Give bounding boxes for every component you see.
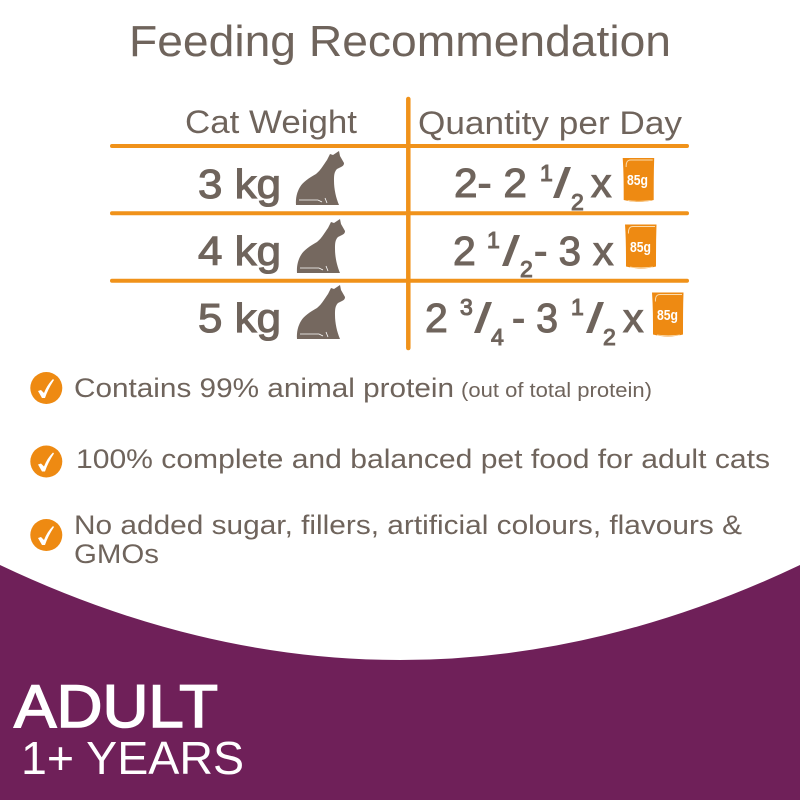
icon: check	[30, 446, 62, 478]
row: 5 kg: 2	[603, 324, 616, 350]
life stage label	[14, 673, 244, 784]
row: 4 kg	[198, 219, 656, 282]
row: 3 kg: 2	[571, 189, 584, 215]
row: 5 kg	[198, 285, 684, 350]
icon: check	[30, 519, 62, 551]
row: 5 kg: 2	[425, 295, 448, 341]
column heading: quantity per day: Quantity per Day	[418, 105, 682, 141]
panel: feeding table	[112, 99, 687, 350]
benefit: animal protein: (out of total protein)	[461, 380, 652, 402]
row: 5 kg: /	[475, 295, 492, 341]
icon: 85g pouch: 85g	[630, 239, 651, 256]
icon: 85g pouch	[623, 158, 654, 202]
row: 3 kg: /	[554, 160, 571, 206]
benefit: complete and balanced: 100% complete and balanced pet food for adult cats	[76, 444, 770, 474]
row: 4 kg: /	[503, 228, 520, 274]
purple footer band	[0, 565, 800, 800]
row: 3 kg: x	[591, 160, 612, 206]
icon: cat	[297, 219, 345, 273]
life stage label: ADULT	[14, 673, 218, 740]
row: 4 kg: 4 kg	[198, 228, 281, 274]
icon: 85g pouch	[652, 292, 684, 336]
icon: 85g pouch	[625, 224, 656, 268]
benefit: no added sugar	[30, 510, 742, 569]
icon: cat	[297, 285, 345, 339]
icon: 85g pouch: 85g	[627, 172, 648, 189]
row: 4 kg: 1	[487, 227, 500, 253]
row: 5 kg: 1	[571, 294, 584, 320]
row: 3 kg: 3 kg	[198, 161, 281, 207]
row: 5 kg: - 3	[512, 295, 558, 341]
row: 3 kg: 1	[540, 160, 553, 186]
column heading: cat weight: Cat Weight	[185, 104, 357, 140]
row: 3 kg: 2- 2	[454, 160, 527, 206]
icon: 85g pouch: 85g	[657, 307, 678, 324]
row: 4 kg: x	[593, 228, 614, 274]
row: 3 kg	[198, 151, 654, 215]
row: 4 kg: 2	[520, 256, 533, 282]
benefit: animal protein	[30, 372, 652, 404]
row: 5 kg: /	[587, 295, 604, 341]
row: 5 kg: 5 kg	[198, 295, 281, 341]
benefit: no added sugar: No added sugar, fillers, artificial colours, flavours &	[74, 510, 742, 540]
row: 5 kg: 3	[460, 294, 473, 320]
icon: check	[30, 372, 62, 404]
icon: cat	[296, 151, 344, 205]
table grid lines	[112, 99, 687, 348]
title: Feeding Recommendation	[129, 17, 671, 66]
benefit: animal protein: Contains 99% animal protein	[74, 373, 454, 403]
row: 5 kg: 4	[491, 324, 504, 350]
row: 5 kg: x	[623, 295, 644, 341]
benefit: no added sugar: GMOs	[74, 539, 159, 569]
row: 4 kg: - 3	[534, 228, 581, 274]
row: 4 kg: 2	[453, 228, 476, 274]
life stage label: 1+ YEARS	[21, 732, 244, 784]
